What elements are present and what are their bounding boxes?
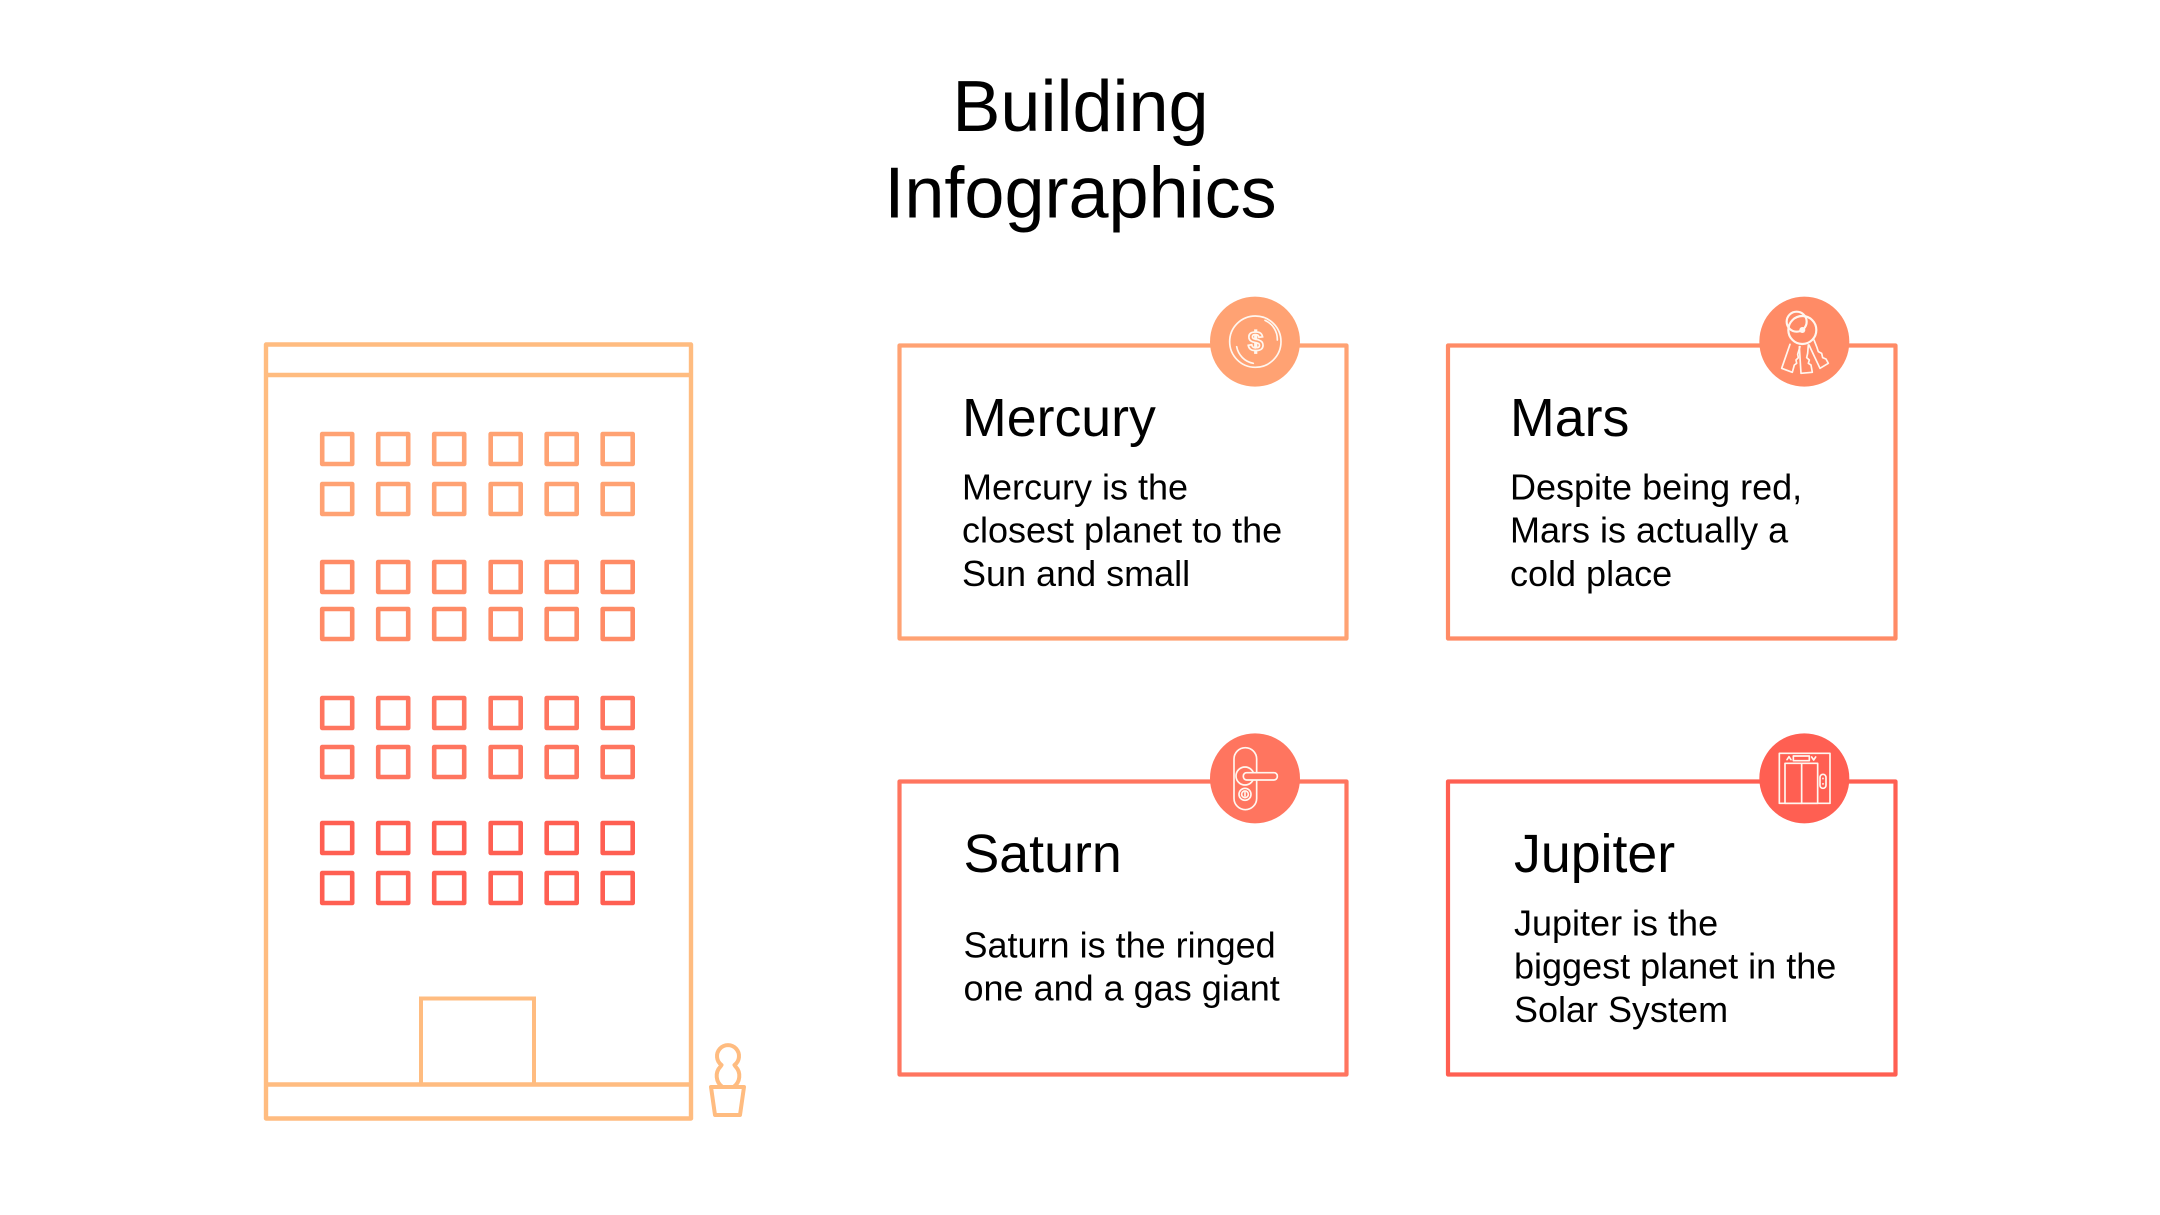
icon: elevator [1759,733,1849,823]
card border [1448,782,1896,1074]
title: Infographics [884,154,1277,234]
windows: floor 4 [322,823,633,903]
description: Mercury is the [962,466,1188,507]
description: Saturn is the ringed [964,924,1276,965]
heading: Mars [1510,388,1629,448]
icon: dollar coin: $ [1248,326,1264,357]
icon: keys [1759,297,1849,387]
building outline [266,344,691,1118]
heading: Saturn [964,824,1122,884]
description: biggest planet in the [1514,946,1836,987]
door [421,998,534,1084]
windows: floor 3 [322,698,633,777]
icon: dollar coin [1210,297,1300,387]
card border [900,346,1346,638]
title: Building [952,67,1209,147]
icon: potted plant [711,1045,744,1115]
description: Sun and small [962,553,1190,594]
description: closest planet to the [962,510,1282,551]
description: one and a gas giant [964,968,1280,1009]
windows: floor 1 [322,434,633,514]
description: Despite being red, [1510,466,1802,507]
panel: Mars [1448,297,1896,638]
panel: Jupiter [1448,733,1896,1074]
icon: door handle [1210,733,1300,823]
windows: floor 2 [322,562,633,639]
description: cold place [1510,553,1672,594]
description: Mars is actually a [1510,510,1789,551]
panel: Mercury [900,297,1346,638]
description: Jupiter is the [1514,902,1718,943]
description: Solar System [1514,989,1728,1030]
card border [1448,346,1896,638]
card border [900,782,1346,1074]
illustration: building [266,344,691,1118]
panel: Saturn [900,733,1346,1074]
heading: Jupiter [1514,824,1675,884]
title [884,67,1277,234]
heading: Mercury [962,388,1156,448]
